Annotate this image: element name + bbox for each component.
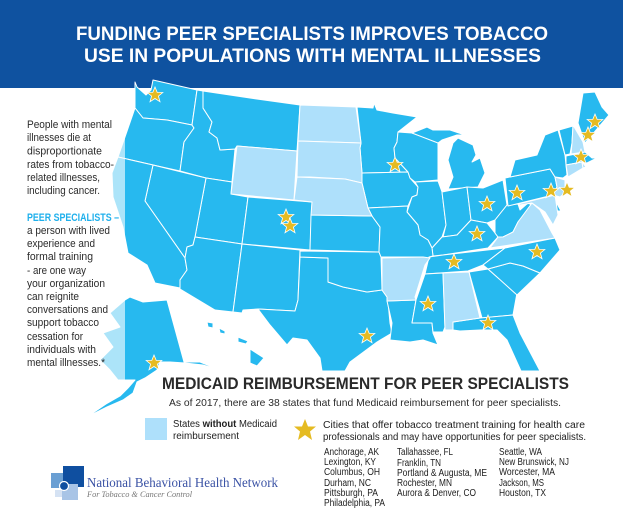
city list: Lexington, KY	[324, 457, 376, 468]
peer specialists text block: your organization	[27, 278, 105, 290]
peer specialists text block: experience and	[27, 238, 95, 250]
states without Medicaid reimbursement	[231, 105, 586, 330]
intro text block: related illnesses,	[27, 172, 100, 184]
city list: Houston, TX	[499, 488, 546, 499]
legend: cities star: professionals and may have opportunities for peer specialists.	[323, 432, 586, 443]
header banner	[0, 0, 623, 88]
legend: states without reimbursement: reimbursement	[173, 431, 239, 442]
city list	[324, 447, 569, 509]
title: USE IN POPULATIONS WITH MENTAL ILLNESSES	[84, 45, 541, 67]
city list: Franklin, TN	[397, 458, 441, 469]
peer specialists text block: a person with lived	[27, 225, 110, 237]
city list: Durham, NC	[324, 478, 371, 489]
peer specialists text block: mental illnesses.*	[27, 357, 105, 369]
logo: National Behavioral Health Network	[51, 466, 278, 500]
city list: Aurora & Denver, CO	[397, 488, 476, 499]
logo: National Behavioral Health Network: For Tobacco & Cancer Control	[86, 490, 193, 499]
intro text block: People with mental	[27, 119, 112, 131]
city list: Worcester, MA	[499, 467, 555, 478]
intro text block: including cancer.	[27, 185, 100, 197]
legend: states without reimbursement	[145, 418, 277, 442]
intro text block: illnesses die at	[27, 132, 92, 144]
city list: Philadelphia, PA	[324, 498, 385, 509]
peer specialists text block: individuals with	[27, 344, 96, 356]
peer specialists text block: can reignite	[27, 291, 79, 303]
peer specialists text block: formal training	[27, 251, 93, 263]
city list: Rochester, MN	[397, 478, 452, 489]
city list: Anchorage, AK	[324, 447, 379, 458]
peer specialists text block: conversations and	[27, 304, 108, 316]
intro text block: rates from tobacco-	[27, 159, 114, 171]
city list: Columbus, OH	[324, 467, 380, 478]
intro text block	[27, 119, 114, 197]
legend: states without reimbursement: States without Medicaid	[173, 419, 277, 430]
peer specialists text block: support tobacco	[27, 317, 99, 329]
peer specialists text block: cessation for	[27, 331, 83, 343]
states with Medicaid reimbursement	[87, 80, 609, 417]
city stars	[146, 87, 603, 370]
section subheading: As of 2017, there are 38 states that fund Medicaid reimbursement for peer specialists.	[169, 397, 561, 409]
peer specialists text block: - are one way	[27, 265, 86, 277]
city list: New Brunswick, NJ	[499, 457, 569, 468]
logo: National Behavioral Health Network: National Behavioral Health Network	[87, 476, 278, 491]
peer specialists text block	[27, 212, 119, 369]
city list: Tallahassee, FL	[397, 447, 453, 458]
Hawaii	[250, 349, 264, 366]
title	[76, 23, 548, 67]
legend: cities star: Cities that offer tobacco treatment training for health care	[323, 420, 585, 431]
city list: Seattle, WA	[499, 447, 542, 458]
section heading: MEDICAID REIMBURSEMENT FOR PEER SPECIALISTS	[162, 374, 569, 393]
intro text block: disproportionate	[27, 146, 102, 158]
city list: Jackson, MS	[499, 478, 544, 489]
pale overlay on the western edge	[0, 88, 125, 380]
city list: Portland & Augusta, ME	[397, 468, 487, 479]
Alaska	[87, 297, 220, 417]
city list: Pittsburgh, PA	[324, 488, 378, 499]
peer specialists text block: PEER SPECIALISTS –	[27, 212, 119, 224]
legend: cities star	[294, 419, 586, 443]
title: FUNDING PEER SPECIALISTS IMPROVES TOBACCO	[76, 23, 548, 45]
bottom crop	[160, 371, 623, 511]
